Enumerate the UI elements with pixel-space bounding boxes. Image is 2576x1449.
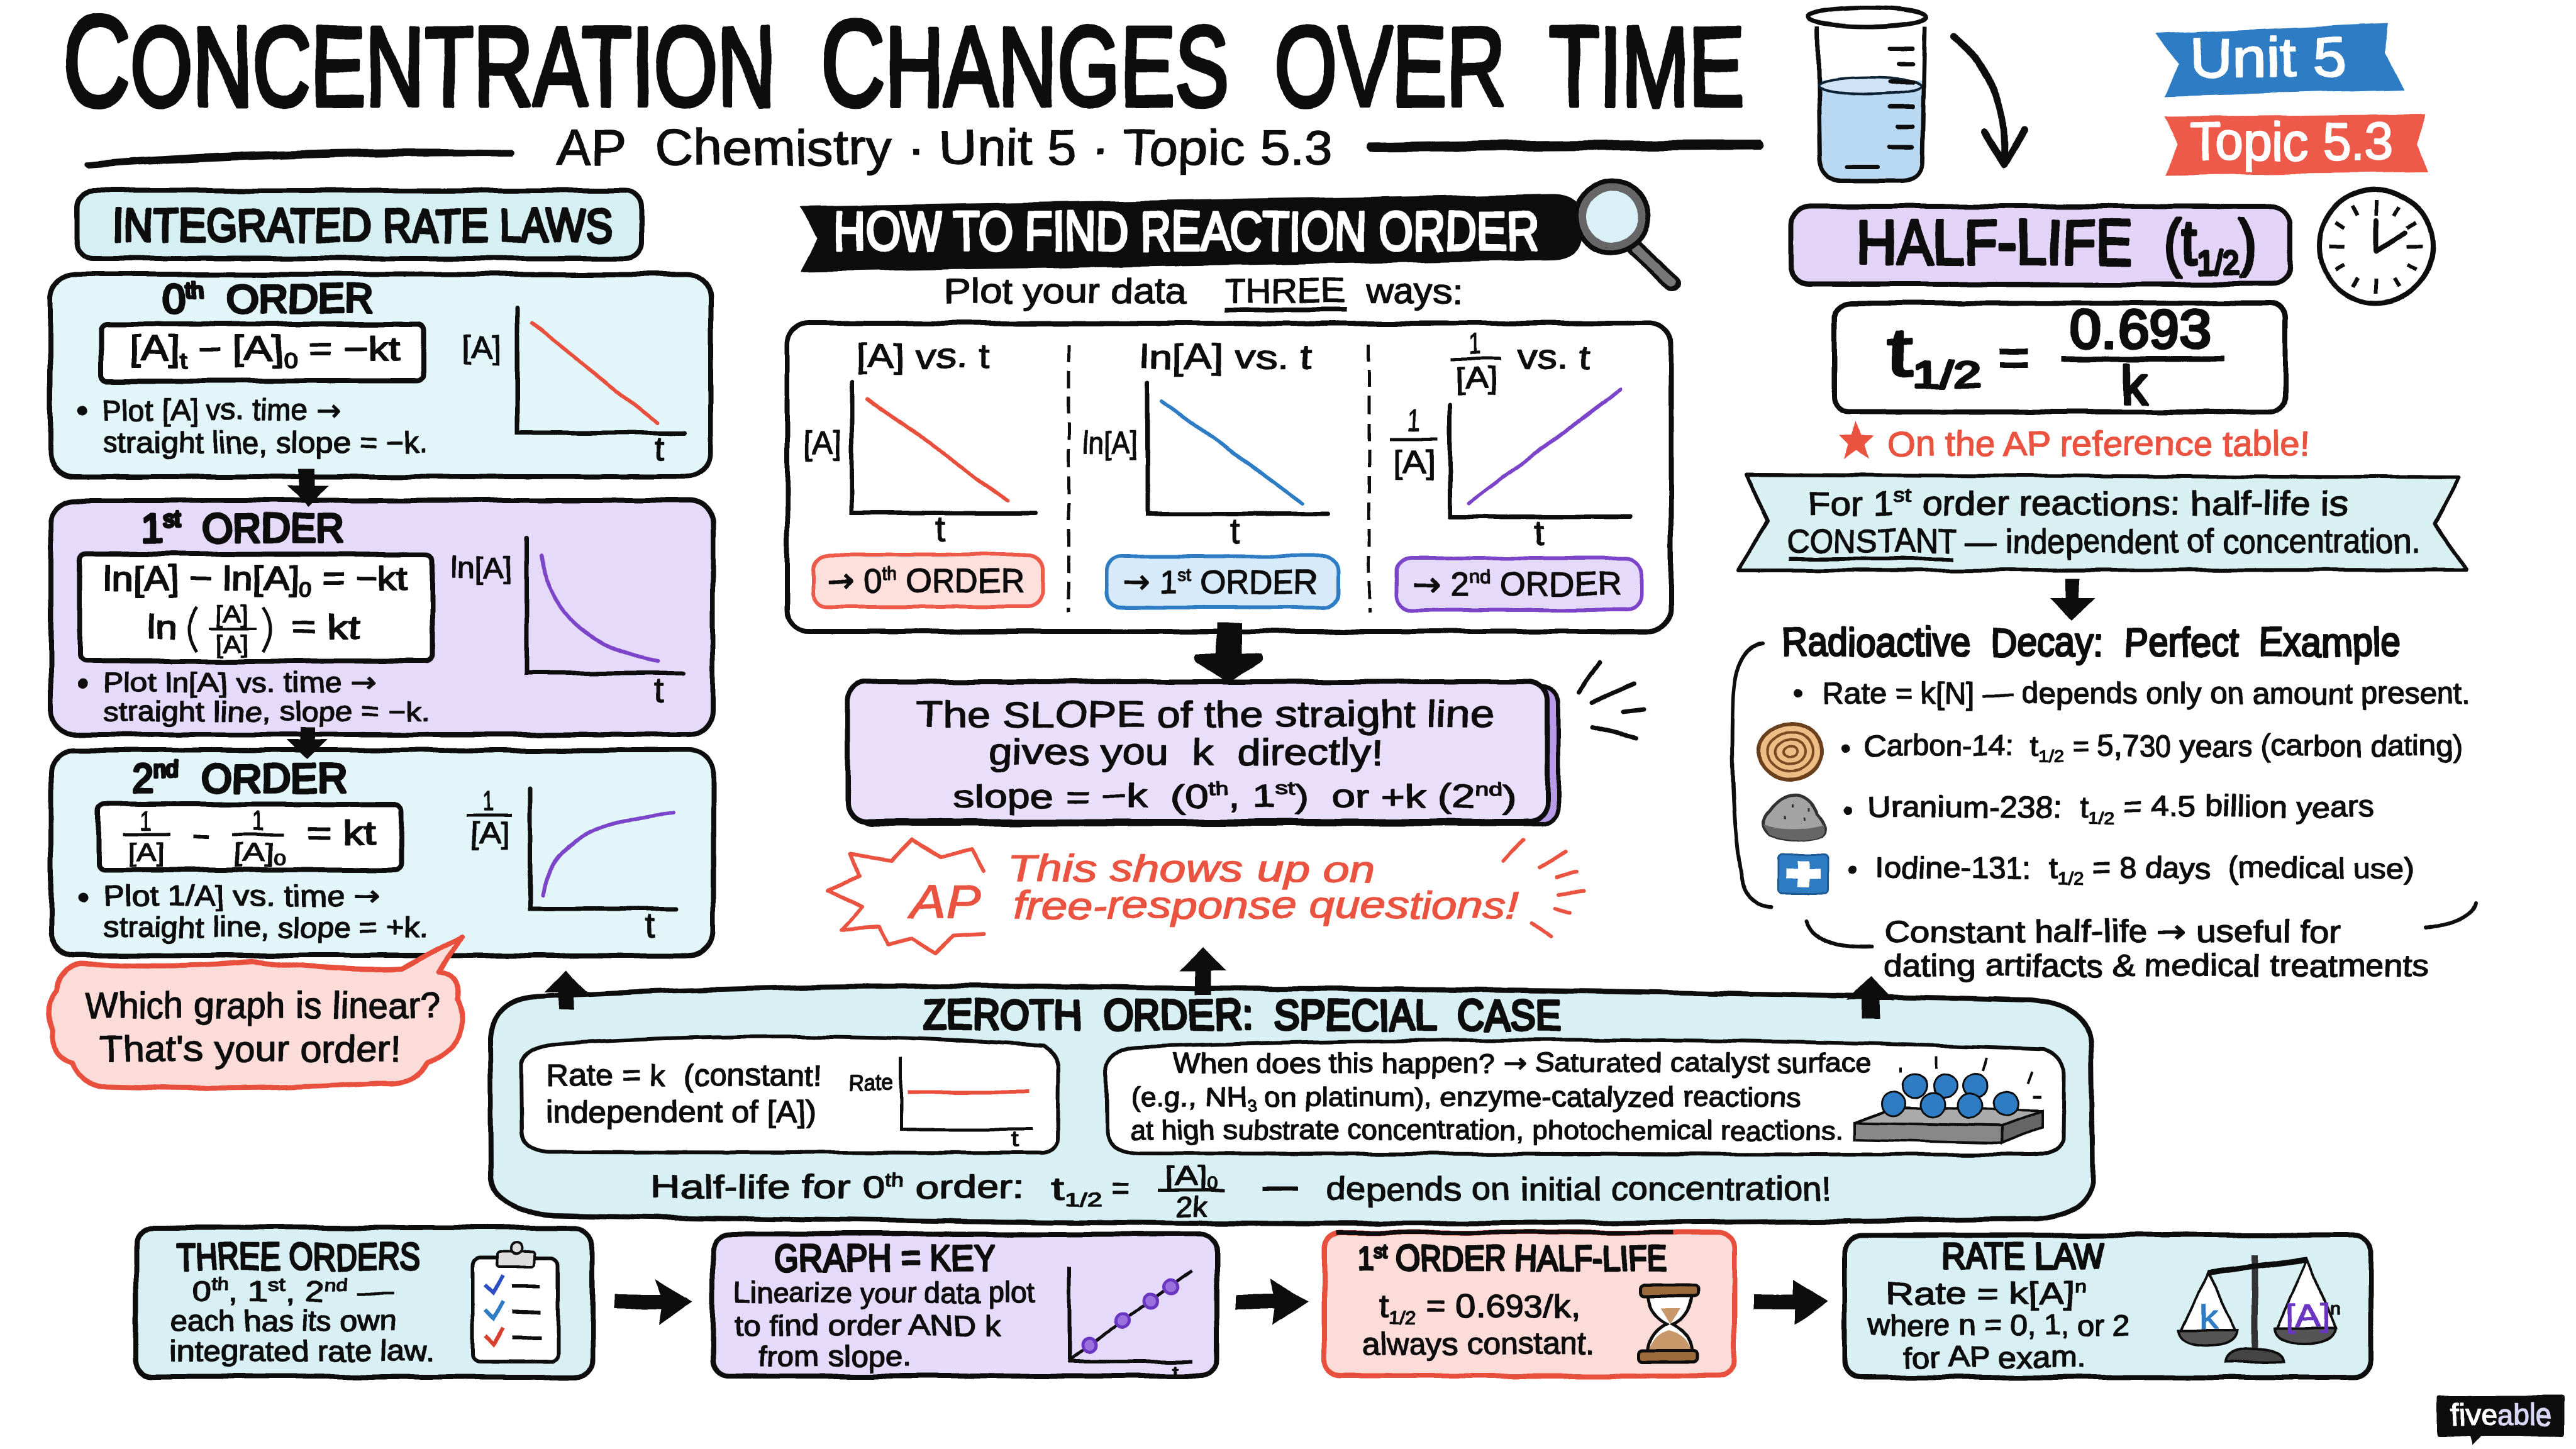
card: three orders: — (348, 1275, 393, 1307)
graph: 0th order (462, 308, 684, 468)
text: plot your data: ways: (1365, 271, 1462, 311)
ribbon: constant half-life: order reactions: half-life is (1911, 485, 2348, 523)
graph: 2nd order (467, 786, 676, 945)
heading: integrated rate laws: INTEGRATED RATE LAWS (113, 199, 612, 252)
note: AP reference table: On the AP reference table! (1887, 423, 2311, 463)
text: 2nd order notes: Plot 1/A] vs. time → (103, 879, 380, 913)
equation box (80, 554, 432, 661)
heading: 1st order: st (164, 506, 180, 532)
arrow: zeroth up right (1846, 977, 1894, 1019)
graph: 2nd order: [A] (470, 817, 509, 850)
panel: slope callout: slope = −k (0 (953, 779, 1152, 815)
text: half-life for 0th order: 1/2 (1064, 1190, 1102, 1211)
card: rate law: RATE LAW (1941, 1236, 2104, 1277)
inset: when does this happen: on platinum), enzyme-catalyzed reactions (1257, 1082, 1801, 1113)
inset: rate constant: Rate = k (constant! (546, 1060, 823, 1093)
pill: 1st order: ORDER (1191, 564, 1318, 601)
formula: half-life: k (2121, 355, 2148, 416)
text: half-life for 0th order: 0 (1206, 1174, 1218, 1193)
arrow: three orders to graph key (614, 1279, 692, 1325)
inset: when does this happen: 3 (1247, 1096, 1257, 1115)
text: carbon-14 (1842, 729, 2462, 766)
heading: radioactive decay: Radioactive Decay: Perfect Example (1781, 619, 2401, 665)
panel: slope callout (848, 682, 1558, 824)
panel: 1st order (51, 501, 713, 735)
card: three orders: integrated rate law. (170, 1335, 435, 1367)
text: half-life for 0th order: th (885, 1169, 905, 1190)
panel: slope callout: nd (1475, 779, 1502, 799)
heading: 2nd order: nd (154, 757, 179, 782)
panel: slope callout: st (1275, 779, 1295, 799)
graph: 1st order: ln[A] (451, 552, 512, 585)
equation box: 0 (275, 850, 287, 869)
graph: 1/[A] vs t: vs. t (1518, 338, 1590, 376)
inset: rate constant: independent of [A]) (546, 1096, 817, 1129)
equation box: 1 (252, 806, 264, 836)
formula: half-life: 1/2 (1913, 355, 1981, 396)
graph: 0th order: t (654, 428, 664, 468)
callout: which graph is linear: That's your order! (99, 1029, 401, 1070)
pill: 0th order (813, 555, 1043, 607)
ribbon: constant half-life: CONSTANT — independent of concentration. (1787, 523, 2420, 560)
pill: 1st order: st (1177, 565, 1192, 586)
graph: [A] vs t (804, 338, 1035, 548)
equation box: = kt (308, 814, 375, 852)
callout: which graph is linear (50, 936, 463, 1088)
card: rate law: for AP exam. (1903, 1341, 2086, 1374)
inset: when does this happen: (e.g., NH (1131, 1082, 1241, 1113)
graph: ln[A] vs t: ln[A] vs. t (1140, 338, 1311, 376)
icon: balance scale: k (2199, 1299, 2219, 1336)
heading: half-life: HALF-LIFE (t (1857, 208, 2245, 278)
card: graph = key (713, 1234, 1217, 1381)
text: uranium-238: = 4.5 billion years (2115, 790, 2374, 823)
text: iodine-131: 1/2 (2057, 869, 2083, 888)
pill: 2nd order: → 2 (1413, 564, 1469, 604)
card: 1st order half-life: 1/2 (1389, 1307, 1416, 1327)
card: graph = key: from slope. (758, 1340, 911, 1372)
graph: 1st order (451, 538, 683, 710)
logo: fiveable (2438, 1396, 2565, 1446)
graph: [A] vs t: t (935, 509, 945, 548)
callout: AP free response (828, 840, 1584, 953)
panel: 2nd order (51, 750, 713, 955)
icon: rock (1764, 796, 1825, 840)
text: plot your data: Plot your data (945, 271, 1188, 311)
card: rate law: n (2074, 1277, 2086, 1296)
equation box (99, 804, 401, 870)
equation box (101, 324, 424, 381)
inset: rate constant: t (1011, 1128, 1019, 1152)
card: three orders: , 1 (229, 1275, 268, 1307)
text: constant half-life usefulness (1807, 902, 2476, 983)
icon: tree rings (1759, 724, 1822, 780)
equation box: − [A] (187, 328, 284, 368)
callout: AP free response: AP (909, 875, 980, 928)
badge: Unit 5: Unit 5 (2190, 26, 2346, 89)
text: half-life for 0th order: depends on initial concentration! (1327, 1171, 1832, 1208)
icon: beaker (1808, 8, 1926, 180)
card: rate law: where n = 0, 1, or 2 (1867, 1309, 2130, 1341)
equation box: [A] (216, 631, 248, 657)
pill: 1st order (1107, 556, 1338, 608)
subtitle: AP Chemistry · Unit 5 · Topic 5.3 (557, 119, 1333, 175)
panel: zeroth order (491, 986, 2092, 1223)
text: half-life for 0th order: [A] (1165, 1161, 1199, 1192)
equation box: [A] (234, 839, 265, 867)
text: half-life for 0th order: order: (905, 1169, 1024, 1206)
icon: clock (2319, 190, 2433, 303)
badge: Unit 5 (2155, 23, 2404, 96)
graph: [A] vs t: [A] (804, 425, 842, 462)
card: three orders: , 2 (285, 1275, 324, 1307)
equation box: [A] (130, 328, 172, 368)
equation box: 0 (299, 578, 312, 601)
text: iodine-131: = 8 days (medical use) (2083, 851, 2414, 884)
card: 1st order half-life (1324, 1233, 1735, 1376)
card: rate law (1845, 1235, 2371, 1377)
card: three orders: 0 (191, 1275, 208, 1307)
card: 1st order half-life: t (1379, 1289, 1388, 1324)
equation box: 1 (140, 806, 152, 836)
formula: half-life: 0.693 (2070, 299, 2212, 360)
text: half-life for 0th order: = (1112, 1171, 1130, 1208)
graph: 2nd order: 1 (483, 786, 494, 817)
graph: ln[A] vs t: t (1230, 511, 1240, 550)
pill: 0th order: → 0 (827, 561, 883, 601)
chart: linearized data (1069, 1266, 1192, 1381)
panel: 0th order (50, 274, 711, 477)
pill: 2nd order (1397, 558, 1642, 610)
card: graph = key: to find order AND k (734, 1309, 1001, 1341)
graph: 1/[A] vs t: 1 (1470, 328, 1481, 360)
icon: balance scale: n (2329, 1299, 2340, 1319)
pill: 0th order: th (882, 564, 897, 584)
icon: balance scale: [A] (2285, 1298, 2324, 1333)
text: uranium-238: 1/2 (2089, 808, 2115, 827)
graph: [A] vs t: [A] vs. t (856, 338, 989, 375)
arrow: 1st to 2nd (287, 727, 328, 760)
pill: 0th order: ORDER (897, 562, 1024, 600)
panel: radioactive decay (1733, 619, 2476, 983)
graph: 1/[A] vs t: [A] (1394, 445, 1435, 480)
inset: when does this happen (1106, 1040, 2064, 1155)
icon: hourglass (1639, 1285, 1698, 1362)
text: constant half-life usefulness: Constant half-life → useful for (1884, 914, 2341, 950)
equation box: ln[A] − ln[A] (103, 560, 278, 597)
equation box: [A] (216, 602, 248, 628)
heading: integrated rate laws (77, 191, 641, 258)
text: half-life for 0th order: 2k (1176, 1192, 1208, 1223)
pill: 2nd order: ORDER (1490, 565, 1621, 603)
formula: half-life: t (1887, 314, 1906, 391)
card: three orders: th (211, 1274, 229, 1294)
subtitle (84, 119, 1764, 175)
graph: 2nd order: t (645, 906, 655, 945)
text: 2nd order notes: straight line, slope = +k. (103, 911, 428, 943)
icon: magnifier (1576, 182, 1673, 283)
arrow: zeroth up center (1180, 947, 1226, 995)
graph: 0th order: [A] (462, 330, 501, 365)
arrow: ribbon to radioactive decay (2049, 578, 2096, 621)
callout: which graph is linear: Which graph is linear? (84, 985, 440, 1026)
arrow: graph key to half-life (1235, 1279, 1309, 1325)
text: 1st order notes (77, 667, 430, 727)
text: carbon-14: Carbon-14: t (1865, 729, 2037, 762)
card: 1st order half-life: 1 (1357, 1238, 1377, 1278)
graph: 1/[A] vs t (1390, 328, 1630, 552)
heading: 0th order: 0 (163, 276, 186, 321)
equation box: ln (147, 608, 176, 646)
card: graph = key: GRAPH = KEY (774, 1237, 996, 1279)
card: 1st order half-life: always constant. (1362, 1326, 1595, 1361)
card: three orders: each has its own (170, 1304, 396, 1337)
text: rate: Rate = k[N] — depends only on amount present. (1823, 677, 2470, 711)
pill: 1st order: → 1 (1123, 562, 1179, 602)
banner: how to find reaction order: HOW TO FIND REACTION ORDER (834, 200, 1538, 262)
text: uranium-238: Uranium-238: t (1868, 790, 2072, 823)
badge: Topic 5.3: Topic 5.3 (2190, 112, 2393, 171)
equation box: t (180, 349, 187, 373)
equation box: = −kt (297, 328, 401, 368)
panel: three graphs (787, 323, 1671, 631)
panel: slope callout: ) or +k (2 (1294, 779, 1475, 815)
chart: linearized data: t (1172, 1362, 1179, 1381)
callout: AP free response: This shows up on (1008, 848, 1375, 890)
heading: 2nd order: 2 (131, 756, 154, 801)
arrow: zeroth up left (545, 970, 587, 1010)
banner: how to find reaction order (800, 194, 1584, 272)
text: 1st order notes: Plot ln[A] vs. time → (103, 667, 377, 699)
text: plot your data: THREE (1224, 271, 1345, 311)
equation box: = −kt (312, 560, 408, 597)
text: 1st order notes: straight line, slope = −k. (103, 696, 430, 727)
card: rate law: Rate = k[A] (1886, 1275, 2043, 1311)
equation box: = kt (292, 608, 360, 646)
icon: medical cross (1778, 854, 1828, 893)
text: uranium-238 (1844, 790, 2374, 827)
card: three orders: nd (324, 1274, 348, 1294)
formula: half-life (1835, 299, 2285, 416)
ribbon: constant half-life (1738, 475, 2467, 570)
graph: 1/[A] vs t: [A] (1455, 362, 1497, 394)
arrow: 0th to 1st (287, 469, 328, 507)
panel: slope callout: The SLOPE of the straight line (917, 694, 1494, 735)
text: iodine-131: Iodine-131: t (1875, 851, 2048, 884)
text: iodine-131 (1848, 851, 2414, 888)
graph: 1/[A] vs t: 1 (1407, 402, 1420, 439)
pill: 2nd order: nd (1469, 567, 1490, 587)
panel: slope callout: , 1 (1228, 779, 1275, 815)
ribbon: constant half-life: For 1 (1807, 485, 1886, 523)
heading: 2nd order: ORDER (179, 756, 347, 801)
text: carbon-14: 1/2 (2039, 747, 2063, 766)
inset: rate constant (521, 1036, 1058, 1153)
heading: 1st order: 1 (142, 506, 164, 551)
arrow: half-life to rate law (1753, 1279, 1828, 1325)
icon: catalyst surface (1853, 1057, 2043, 1143)
logo: fiveable: fiveable (2451, 1397, 2553, 1433)
panel: slope callout: gives you k directly! (989, 732, 1384, 773)
icon: clipboard (473, 1243, 558, 1362)
card: three orders (136, 1228, 592, 1377)
graph: ln[A] vs t (1083, 338, 1328, 550)
heading: 0th order: th (186, 277, 204, 303)
text: half-life for 0th order: t (1051, 1171, 1060, 1208)
ribbon: constant half-life: st (1894, 484, 1911, 507)
text: 0th order notes: Plot [A] vs. time → (103, 393, 341, 428)
text: 2nd order notes (77, 879, 428, 943)
graph: ln[A] vs t: ln[A] (1083, 426, 1138, 461)
text: half-life for 0th order: Half-life for 0 (650, 1169, 836, 1206)
graph: 1/[A] vs t: t (1533, 513, 1543, 552)
graph: 1st order: t (654, 670, 664, 710)
card: 1st order half-life: ORDER HALF-LIFE (1388, 1238, 1667, 1278)
text: plot your data (945, 271, 1462, 311)
arrow: beaker to half-life (1955, 36, 2026, 165)
heading: zeroth order: ZEROTH ORDER: SPECIAL CASE (923, 991, 1561, 1039)
accent: slope burst lines (1579, 662, 1643, 738)
arrow: graphs to slope (1194, 623, 1263, 682)
card: graph = key: Linearize your data plot (734, 1277, 1035, 1309)
heading: 0th order: ORDER (204, 276, 374, 321)
callout: AP free response: free-response questions! (1013, 884, 1519, 926)
panel: slope callout: ) (1502, 779, 1516, 815)
panel: slope callout: th (1208, 779, 1228, 799)
card: 1st order half-life: = 0.693/k, (1416, 1289, 1580, 1324)
equation box: [A] (128, 839, 165, 867)
text: 0th order notes (77, 393, 427, 459)
heading: half-life: ) (2239, 208, 2257, 278)
text: 0th order notes: straight line, slope = −k. (103, 426, 427, 459)
card: 1st order half-life: st (1374, 1240, 1388, 1262)
icon: balance scale (2179, 1255, 2340, 1362)
text: carbon-14: = 5,730 years (carbon dating) (2063, 729, 2462, 762)
inset: when does this happen: at high substrate concentration, photochemical reactions. (1131, 1115, 1843, 1146)
inset: rate constant: Rate (849, 1069, 894, 1095)
text: constant half-life usefulness: dating artifacts & medical treatments (1884, 949, 2429, 983)
equation box: 0 (284, 349, 297, 373)
heading: half-life: 1/2 (2197, 244, 2239, 282)
card: three orders: THREE ORDERS (177, 1236, 420, 1278)
inset: when does this happen: When does this happen? → Saturated catalyst surface (1173, 1047, 1872, 1079)
text: half-life for 0th order (650, 1161, 1832, 1223)
card: three orders: st (268, 1274, 285, 1294)
heading: 1st order: ORDER (180, 506, 344, 551)
